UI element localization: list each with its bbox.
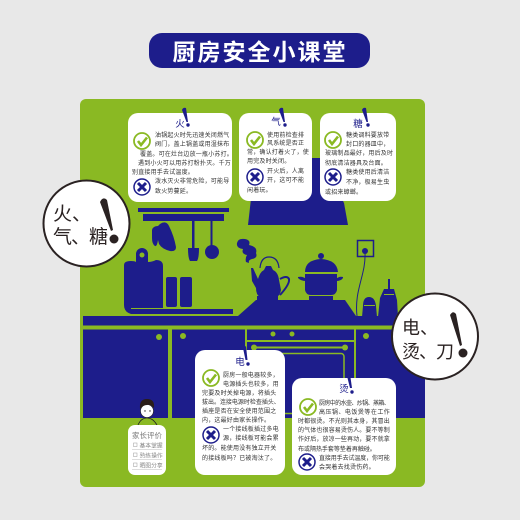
jars [166,277,192,307]
text: fire advice: 油锅起火时先迅速关闭燃气 [155,131,229,139]
text: sugar advice [325,131,393,196]
icon: check [247,132,263,148]
icon: cross [299,454,315,470]
text: electricity advice [202,371,280,462]
stove top [238,300,356,316]
heading: fire: 火 [175,119,185,130]
text: burns advice: 高压锅、电饭煲等在工作 [319,408,390,416]
text: burns advice: 时都很烫。不光则其本身，其冒出 [298,417,390,425]
callout: electricity, burns, knives [392,294,478,380]
text: electricity advice: 源，接线板可能会累 [223,434,279,442]
heading: sugar: 糖 [353,118,363,130]
text: fire advice: 别直接用手去试温度。 [132,168,194,176]
text: burns advice: 布或隔热手套等垫着再触碰。 [298,445,376,453]
panel: green kitchen background [80,99,425,487]
rating options: 熟练操作 [140,452,163,460]
text: burns advice: 的气体也很容易烫伤人。要不等制 [298,426,390,434]
text: burns advice: 作好后，放凉一些再动，要不就拿 [298,435,390,443]
rating options: 基本掌握 [140,442,163,450]
exclamation mark [182,108,190,127]
text: fire advice: 遇到小火可以用苏打粉扑灭。千万 [138,159,231,167]
icon: cross [325,169,341,185]
pot [298,253,343,301]
text: electricity advice: 完要及时关掉电源，将插头 [202,389,276,397]
text: fire advice: 阀门，盖上锅盖或用湿抹布 [155,140,229,148]
callout: electricity, burns, knives: 烫、刀 [402,342,453,362]
text: gas advice: 常，确认打着火了，使 [247,148,309,156]
text: gas advice: 用完及时关闭。 [247,157,290,165]
text: fire advice: 泼水灭火非常危险，可能导 [155,177,229,185]
exclamation mark [243,346,250,366]
icon: ladle [205,221,219,259]
range hood [248,158,348,225]
pepper shaker and bottle [362,279,398,317]
callout: electricity, burns, knives: 电、 [402,318,438,338]
parent rating card: 家长评价 [132,430,162,440]
text: burns advice [298,399,390,471]
kettle with steam [237,239,289,301]
text: sugar advice: 糖类调料要放带 [346,131,389,139]
text: sugar advice: 糖类使用后清洁 [346,168,389,176]
shelf [131,309,233,314]
text: fire advice [132,131,233,195]
icon: cross [247,169,263,185]
icon: oven mitt [152,222,176,251]
parent rating card [128,425,166,475]
socket and cord [357,240,374,316]
counter and cabinets [83,316,425,418]
rating options [134,442,163,470]
card: burns [292,374,396,475]
text: gas advice: 闲着玩。 [247,186,272,194]
text: fire advice: 覆盖。可在灶台边放一瓶小苏打。 [140,150,233,158]
callout: fire, gas, sugar: 气、糖 [53,226,108,248]
text: electricity advice: 坏的。能使用没有独立开关 [202,444,276,452]
icon: spatula [188,221,199,261]
icon: cross [134,179,150,195]
icon: check [203,370,219,386]
text: electricity advice: 插座是否在安全使用范围之 [202,407,276,415]
text: fire advice: 致火势蔓延。 [155,187,192,195]
exclamation mark [362,108,370,127]
text: burns advice: 直接用手去试温度，你可能 [319,454,390,462]
callout: fire, gas, sugar: 火、 [53,204,91,225]
oven window [258,354,344,414]
heading: gas: 气 [271,116,281,128]
text: burns advice: 会哭着去找烫伤药。 [319,463,375,471]
text: sugar advice: 玻璃制品最好，用后及时 [325,149,393,157]
text: gas advice: 风系统是否正 [267,139,304,147]
exclamation mark [279,108,287,127]
text: gas advice: 开火后，人离 [267,167,304,175]
text: electricity advice: 一个接线板插过多电 [223,425,279,433]
exclamation mark [347,374,354,394]
heading: electricity: 电 [235,356,245,368]
icon: check [134,133,150,149]
rating options: 晒图分享 [140,462,163,470]
callout: fire, gas, sugar [44,180,130,266]
text: electricity advice: 电源插头也较多，用 [223,380,279,388]
card: electricity [195,346,285,475]
text: sugar advice: 封口的器皿中， [346,140,389,148]
card: sugar [320,108,396,201]
title [149,33,370,68]
oven controls [247,332,354,350]
title: 厨房安全小课堂 [172,39,348,65]
text: gas advice: 开，这可不能 [267,176,304,184]
text: electricity advice: 的接线板吗？已被淘汰了。 [202,454,276,462]
parent avatar [138,399,157,425]
text: electricity advice: 厨房一般电器较多， [223,371,279,379]
card: fire [128,108,233,202]
text: gas advice: 使用前检查排 [267,131,304,139]
cutting board [124,248,163,314]
text: electricity advice: 内，这最好由家长操作。 [202,416,270,424]
text: burns advice: 厨房中的水壶、炒锅、蒸箱、 [319,399,390,407]
icon: check [300,399,316,415]
text: sugar advice: 彻底清洁器具及台面。 [325,159,387,167]
text: sugar advice: 或招来蟑螂。 [325,188,362,196]
heading: burns: 烫 [339,384,349,395]
icon: check [325,132,341,148]
text: sugar advice: 不净，极易生虫 [346,178,389,186]
text: electricity advice: 拔出。连接电源时检查插头、 [202,398,280,406]
icon: cross [203,427,219,443]
text: gas advice [247,131,309,194]
hanging rack with mitt and utensils [138,208,229,261]
card: gas [239,108,312,201]
